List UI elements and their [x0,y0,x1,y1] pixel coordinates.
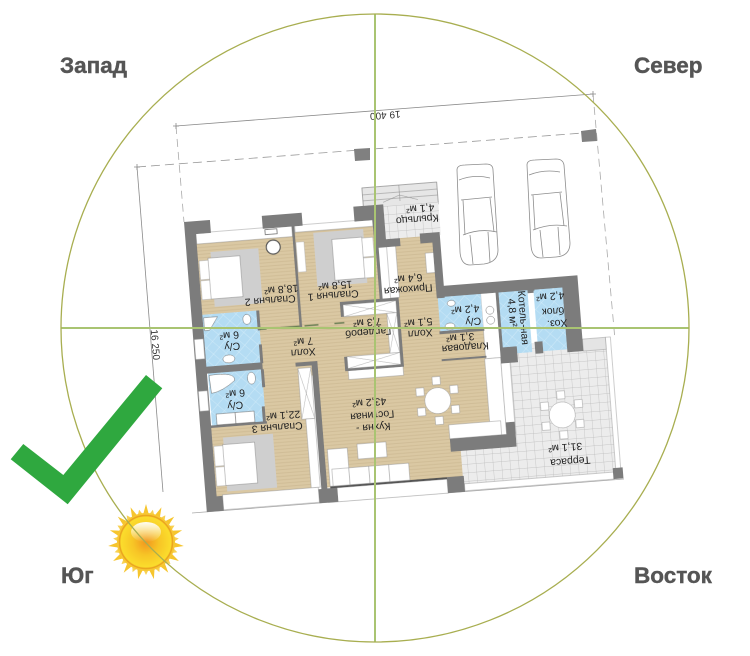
white closets and strips [196,201,622,511]
direction: north: Север [634,53,703,78]
icon: sun [108,504,184,580]
wood floors [196,218,496,496]
label: entry [384,271,433,297]
label: boiler room: 4,8 м² [505,298,519,328]
label: bathroom lower: 6 м² [225,386,245,400]
direction: west: Запад [60,53,127,78]
dimension lines [134,91,624,513]
label: hall 7: 7 м² [293,334,313,348]
check mark [11,375,162,504]
label: hall 7: Холл [290,345,316,359]
label: hall 5: Холл [407,326,433,340]
furniture: bedroom 1 [295,228,376,288]
label: bedroom 2 [244,282,299,308]
label: boiler room [505,290,531,345]
floor plan [182,169,624,512]
label: bedroom 2: 18,8 м² [263,282,299,296]
label: bathroom upper [219,328,241,353]
label: kitchen living: 43,2 м² [351,395,387,409]
entrance steps [362,182,438,210]
terrace floor [453,337,616,484]
label: terrace: 31,1 м² [547,440,583,454]
label: bathroom right [450,302,482,328]
living room furniture [327,440,410,486]
label: wardrobe [345,315,392,340]
label: bathroom right: 4,2 м² [450,302,480,316]
bathroom fixtures [204,295,501,425]
direction: east: Восток [634,563,713,588]
walls [184,187,624,512]
car left [457,164,498,265]
label: bedroom 3 [251,408,303,435]
label: porch: Крыльцо [395,211,439,227]
terrace table [539,389,585,440]
label: utility block: 4,2 м² [535,289,565,303]
label: boiler room: Котель-ная [515,290,531,345]
label: bathroom lower: С/у [226,398,244,412]
label: wardrobe: 7,3 м² [352,315,382,329]
bathrooms [202,286,573,427]
label: bedroom 2: Спальня 2 [244,292,296,308]
car right [527,159,570,258]
label: storage: 3,1 м² [445,330,475,344]
label: hall 5 [403,315,433,340]
label: kitchen living [350,395,395,434]
label: terrace: Терраса [550,453,591,469]
label: bedroom 3: 22,1 м² [265,408,301,422]
label: bedroom 1: Спальня 1 [307,287,359,303]
label: kitchen living: Кухня - [355,420,391,434]
label: bathroom right: С/у [464,314,482,328]
label: bedroom 1: 15,8 м² [317,278,353,292]
dimension label: depth: 16 250 [148,329,161,361]
dining table [415,375,461,426]
label: porch: 4,1 м² [405,201,435,215]
label: bedroom 1 [307,278,359,303]
closet cross marks [293,301,405,419]
label: utility block [535,289,568,330]
label: storage [441,330,489,355]
door lines [260,323,344,329]
label: entry: 6,4 м² [393,271,423,285]
porch tiles [381,202,441,239]
direction: south: Юг [61,563,94,588]
dimension label: width: 19 400 [369,108,401,121]
label: utility block: блок [541,304,565,318]
furniture: bedroom 3 [213,434,277,492]
label: wardrobe: Гардероб [345,324,392,340]
label: entry: Прихожая [384,281,433,297]
site posts [354,129,597,161]
label: hall 5: 5,1 м² [403,315,433,329]
label: bathroom upper: С/у [223,339,241,353]
furniture: bedroom 2 [197,229,285,308]
label: porch [395,201,439,227]
label: bathroom lower [225,386,245,412]
label: utility block: Хоз. [547,316,568,330]
label: storage: Кладовая [441,339,489,355]
label: kitchen living: Гостиная [350,407,395,423]
label: hall 7 [290,334,316,359]
window openings [194,339,209,411]
label: bathroom upper: 6 м² [219,328,239,342]
label: bedroom 3: Спальня 3 [251,419,303,435]
room labels [219,201,591,469]
label: terrace [547,440,591,469]
